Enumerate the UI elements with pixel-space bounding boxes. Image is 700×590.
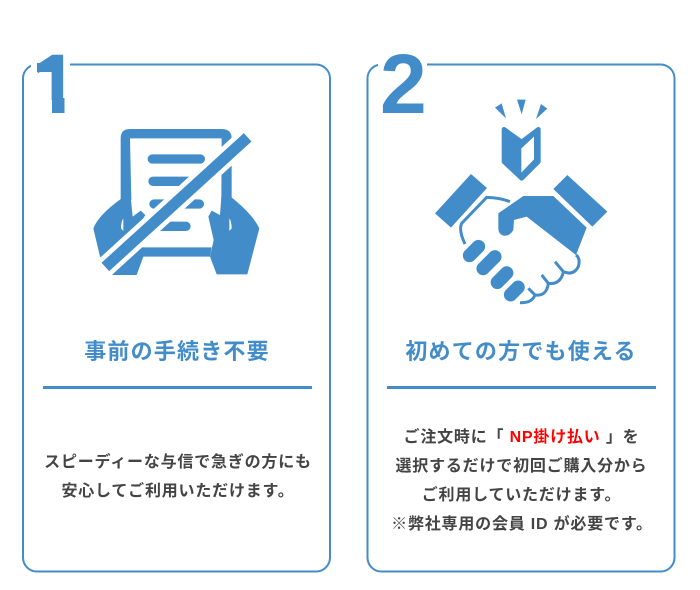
heading 1: 事前の手続き不要 — [84, 339, 270, 364]
body text 1: 安心してご利用いただけます。 — [61, 481, 295, 500]
body text 2 — [391, 427, 653, 533]
number 2: 2 — [380, 37, 427, 131]
body text 2: ※弊社専用の会員 ID が必要です。 — [391, 514, 653, 533]
body text 2: ご注文時に「 NP掛け払い 」を — [404, 427, 639, 446]
number 1: 1 — [32, 37, 79, 131]
divider 1 — [43, 386, 312, 389]
panel: card 1 — [23, 37, 330, 572]
body text 2: ご利用していただけます。 — [422, 485, 621, 504]
body text 1: スピーディーな与信で急ぎの方にも — [44, 452, 312, 471]
divider 2 — [387, 386, 656, 389]
card 2 frame — [368, 64, 674, 572]
body text 1 — [44, 452, 312, 500]
card 1 frame — [23, 64, 330, 572]
panel: card 2 — [368, 37, 674, 572]
heading 2: 初めての方でも使える — [405, 339, 637, 364]
body text 2: 選択するだけで初回ご購入分から — [395, 456, 648, 475]
icon: document crossed out held in hands — [93, 129, 259, 275]
icon: beginner mark over handshake — [435, 100, 607, 304]
